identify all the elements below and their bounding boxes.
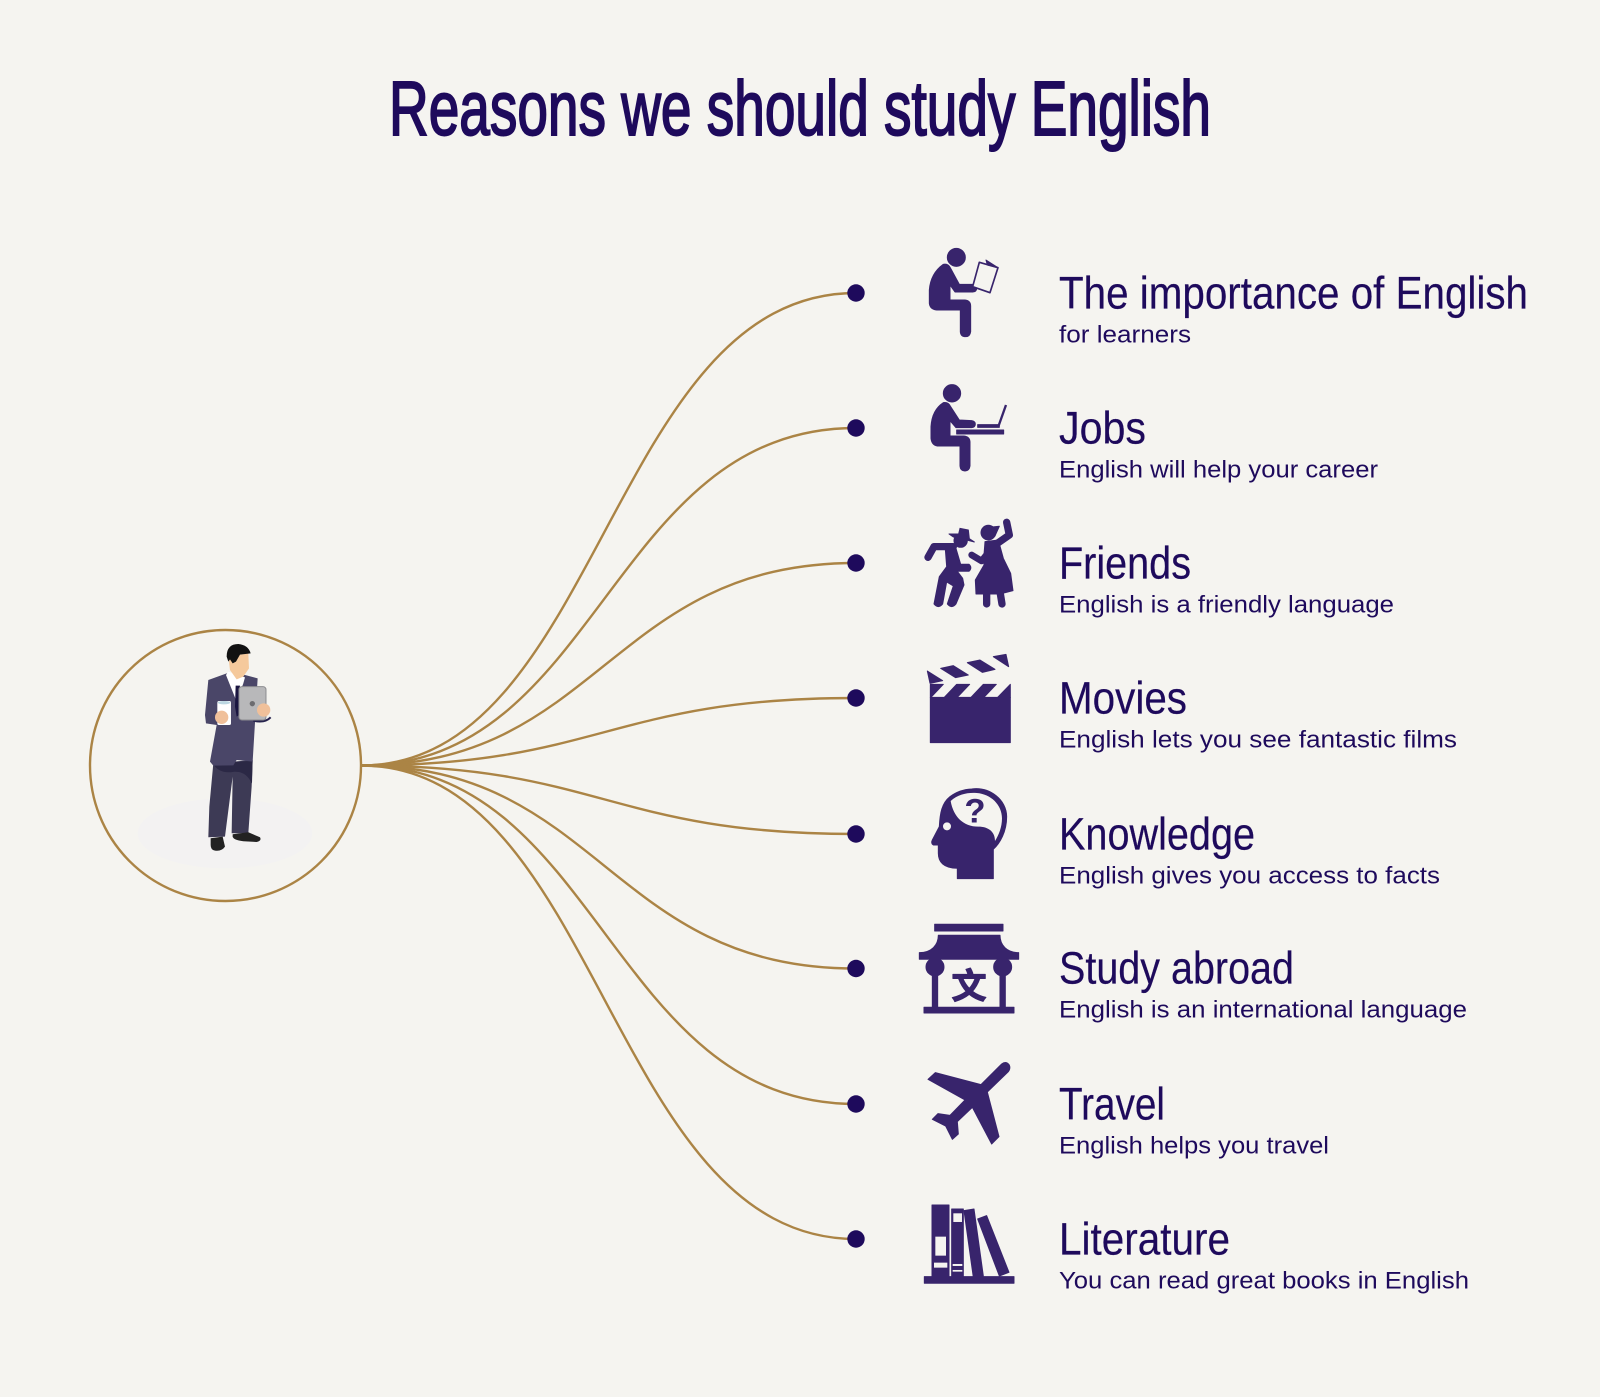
text block: study abroad: [1059, 942, 1467, 1024]
text block: knowledge: [1059, 808, 1440, 890]
text block: importance: for learners: [1059, 322, 1191, 348]
icon: clapperboard: [927, 654, 1010, 743]
text block: knowledge: Knowledge: [1059, 808, 1255, 860]
text block: travel: English helps you travel: [1059, 1132, 1329, 1160]
text block: study abroad: Study abroad: [1059, 942, 1294, 994]
text block: friends: Friends: [1059, 538, 1191, 588]
text block: literature: [1059, 1214, 1469, 1294]
icon: head with question mark: [932, 789, 1007, 879]
text block: knowledge: English gives you access to facts: [1059, 862, 1440, 890]
text block: friends: [1059, 538, 1394, 618]
icon: head with question mark: ?: [964, 793, 986, 831]
text block: jobs: Jobs: [1059, 402, 1146, 454]
dots: [847, 284, 865, 1248]
icon: person reading: [929, 248, 998, 337]
connector curves from circle to dots: [361, 293, 856, 1239]
text block: jobs: English will help your career: [1059, 456, 1378, 484]
icon: businessman with tablet: [138, 644, 312, 868]
icon: dancing couple: [928, 522, 1013, 607]
text block: friends: English is a friendly language: [1059, 592, 1394, 618]
title: Reasons we should study English: [389, 66, 1211, 152]
text block: literature: You can read great books in English: [1059, 1268, 1469, 1294]
text block: study abroad: English is an international language: [1059, 996, 1467, 1024]
text block: literature: Literature: [1059, 1214, 1230, 1264]
text block: movies: English lets you see fantastic films: [1059, 726, 1457, 754]
icon: gate with character: [919, 924, 1019, 1013]
text block: movies: Movies: [1059, 672, 1187, 724]
icon: books on shelf: [924, 1205, 1014, 1283]
text block: importance: [1059, 268, 1528, 348]
icon: person at laptop: [931, 385, 1006, 471]
text block: travel: Travel: [1059, 1078, 1165, 1130]
icon: airplane: [928, 1063, 1010, 1144]
text block: movies: [1059, 672, 1457, 754]
text block: travel: [1059, 1078, 1329, 1160]
icon: gate with character: 文: [951, 968, 987, 1007]
central circle with businessman: [90, 630, 361, 901]
text block: jobs: [1059, 402, 1378, 484]
text block: importance: The importance of English: [1059, 268, 1528, 318]
